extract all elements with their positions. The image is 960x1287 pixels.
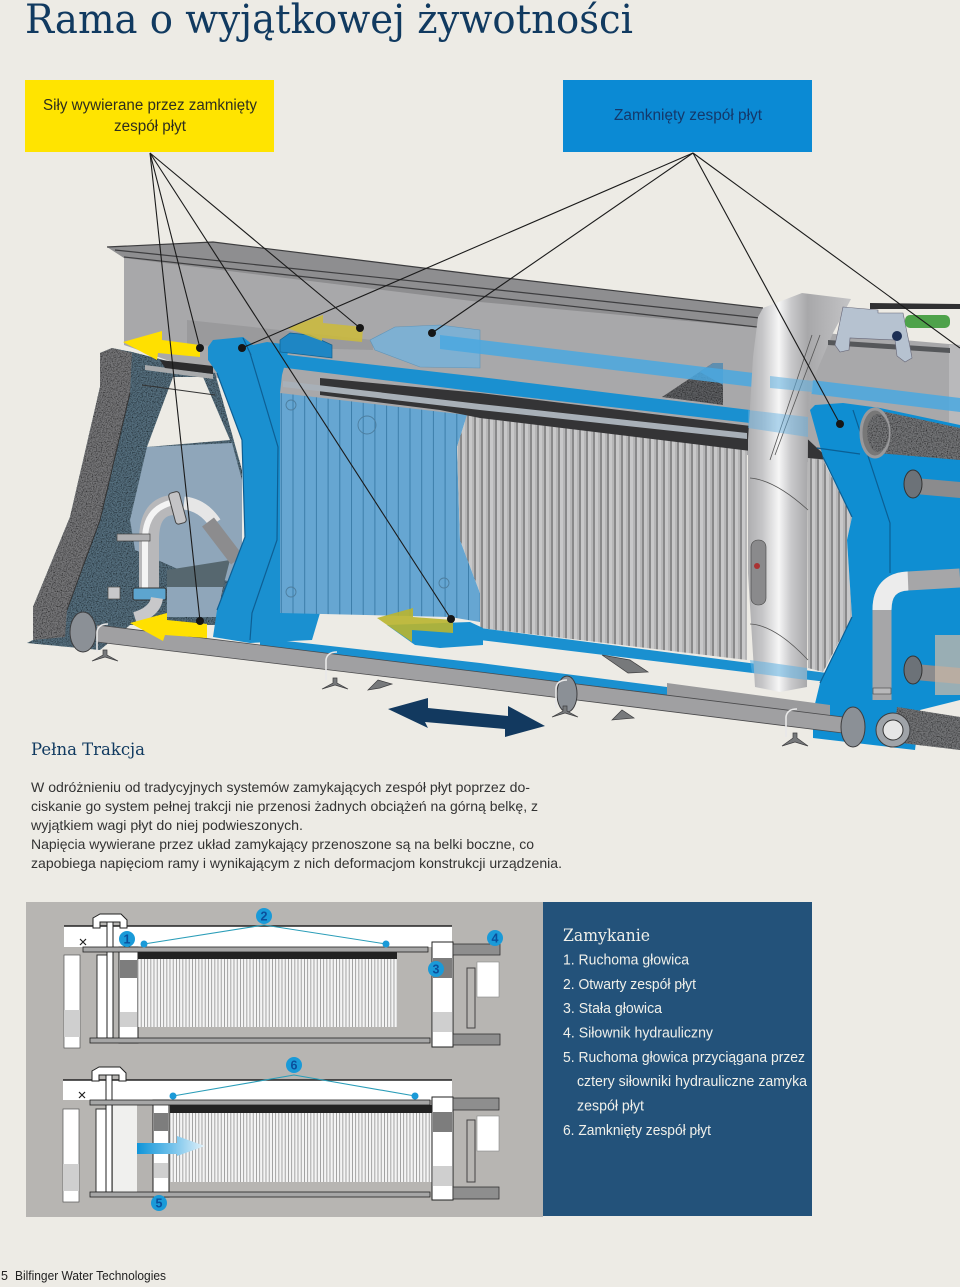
diagram number markers: 6 bbox=[291, 1058, 298, 1072]
force arrows bbox=[123, 315, 453, 642]
right elbow pipe bbox=[882, 578, 960, 700]
diagram: closed plate pack bbox=[63, 1067, 499, 1202]
body text: zapobiega napięciom ramy i wynikającym z nich deformacjom konstrukcji urządzenia. bbox=[31, 855, 562, 871]
plates behind right head bbox=[808, 458, 852, 672]
diagram number markers: 2 bbox=[261, 910, 268, 924]
left elbow pipe bbox=[108, 491, 237, 618]
panel: diagrams bbox=[26, 902, 543, 1217]
body text: W odróżnieniu od tradycyjnych systemów zamykających zespół płyt poprzez do- bbox=[31, 779, 530, 795]
diagram number markers: 4 bbox=[492, 932, 499, 946]
diagram pointer lines bbox=[144, 925, 415, 1096]
legend list bbox=[563, 952, 808, 1139]
rear blue rod bbox=[440, 335, 960, 412]
lower blue rods bbox=[260, 622, 827, 695]
diagram: open plate pack bbox=[64, 914, 500, 1048]
legend list: 3. Stała głowica bbox=[563, 1000, 663, 1017]
bottom gray pipes bbox=[70, 612, 910, 747]
blue moving head bbox=[208, 333, 332, 643]
diagram number markers: 1 bbox=[124, 932, 131, 946]
footer: 5 bbox=[1, 1269, 8, 1283]
callout dots bbox=[196, 324, 844, 625]
diagram number markers: 5 bbox=[156, 1196, 163, 1210]
support feet bbox=[92, 650, 808, 746]
footer: Bilfinger Water Technologies bbox=[15, 1269, 166, 1283]
right fixed head bbox=[810, 403, 960, 750]
upper beam bbox=[107, 242, 960, 480]
gray plates section bbox=[457, 415, 747, 660]
speckled cylinder top bbox=[861, 409, 960, 460]
diagram number markers: 3 bbox=[433, 962, 440, 976]
lower right speckled cylinder bbox=[893, 707, 960, 750]
body text: wyjątkiem wagi płyt do niej podwieszonych. bbox=[30, 817, 303, 833]
section heading: Pełna Trakcja bbox=[31, 740, 145, 760]
body text: ciskanie go system pełnej trakcji nie przenosi żadnych obciążeń na górną belkę, z bbox=[31, 798, 538, 814]
legend list: 4. Siłownik hydrauliczny bbox=[563, 1024, 713, 1042]
diagram number markers bbox=[119, 908, 503, 1211]
legend list: 1. Ruchoma głowica bbox=[563, 952, 690, 968]
yellow label box: Siły wywierane przez zamknięty bbox=[43, 97, 257, 114]
callout lines bbox=[150, 153, 960, 621]
yellow label box bbox=[25, 80, 274, 152]
legend list: 5. Ruchoma głowica przyciągana przez bbox=[563, 1049, 805, 1066]
right gear mechanism bbox=[828, 303, 960, 362]
pipe clamps bbox=[97, 624, 797, 737]
light blue translucent bracket bbox=[370, 325, 480, 368]
translucent plate section bbox=[280, 393, 480, 622]
navy double arrow bbox=[388, 698, 545, 737]
small rods with flanges bbox=[904, 470, 960, 695]
legend list: zespół płyt bbox=[577, 1098, 645, 1114]
dark rail bbox=[283, 378, 830, 460]
silver shield cover bbox=[748, 293, 851, 692]
blue label box bbox=[563, 80, 812, 152]
panel: legend bbox=[543, 902, 812, 1216]
legend list: 2. Otwarty zespół płyt bbox=[563, 976, 697, 993]
body text: Napięcia wywierane przez układ zamykający przenoszone są na belki boczne, co bbox=[31, 836, 534, 852]
blue label box: Zamknięty zespół płyt bbox=[614, 107, 763, 124]
legend list: 6. Zamknięty zespół płyt bbox=[563, 1122, 712, 1139]
top blue rod bbox=[262, 352, 750, 423]
yellow label box: zespół płyt bbox=[114, 118, 187, 135]
legend heading: Zamykanie bbox=[563, 926, 650, 946]
legend list: cztery siłowniki hydrauliczne zamyka bbox=[577, 1073, 808, 1090]
machine illustration bbox=[27, 242, 960, 750]
body text bbox=[30, 779, 562, 871]
left support frame bbox=[27, 348, 242, 650]
